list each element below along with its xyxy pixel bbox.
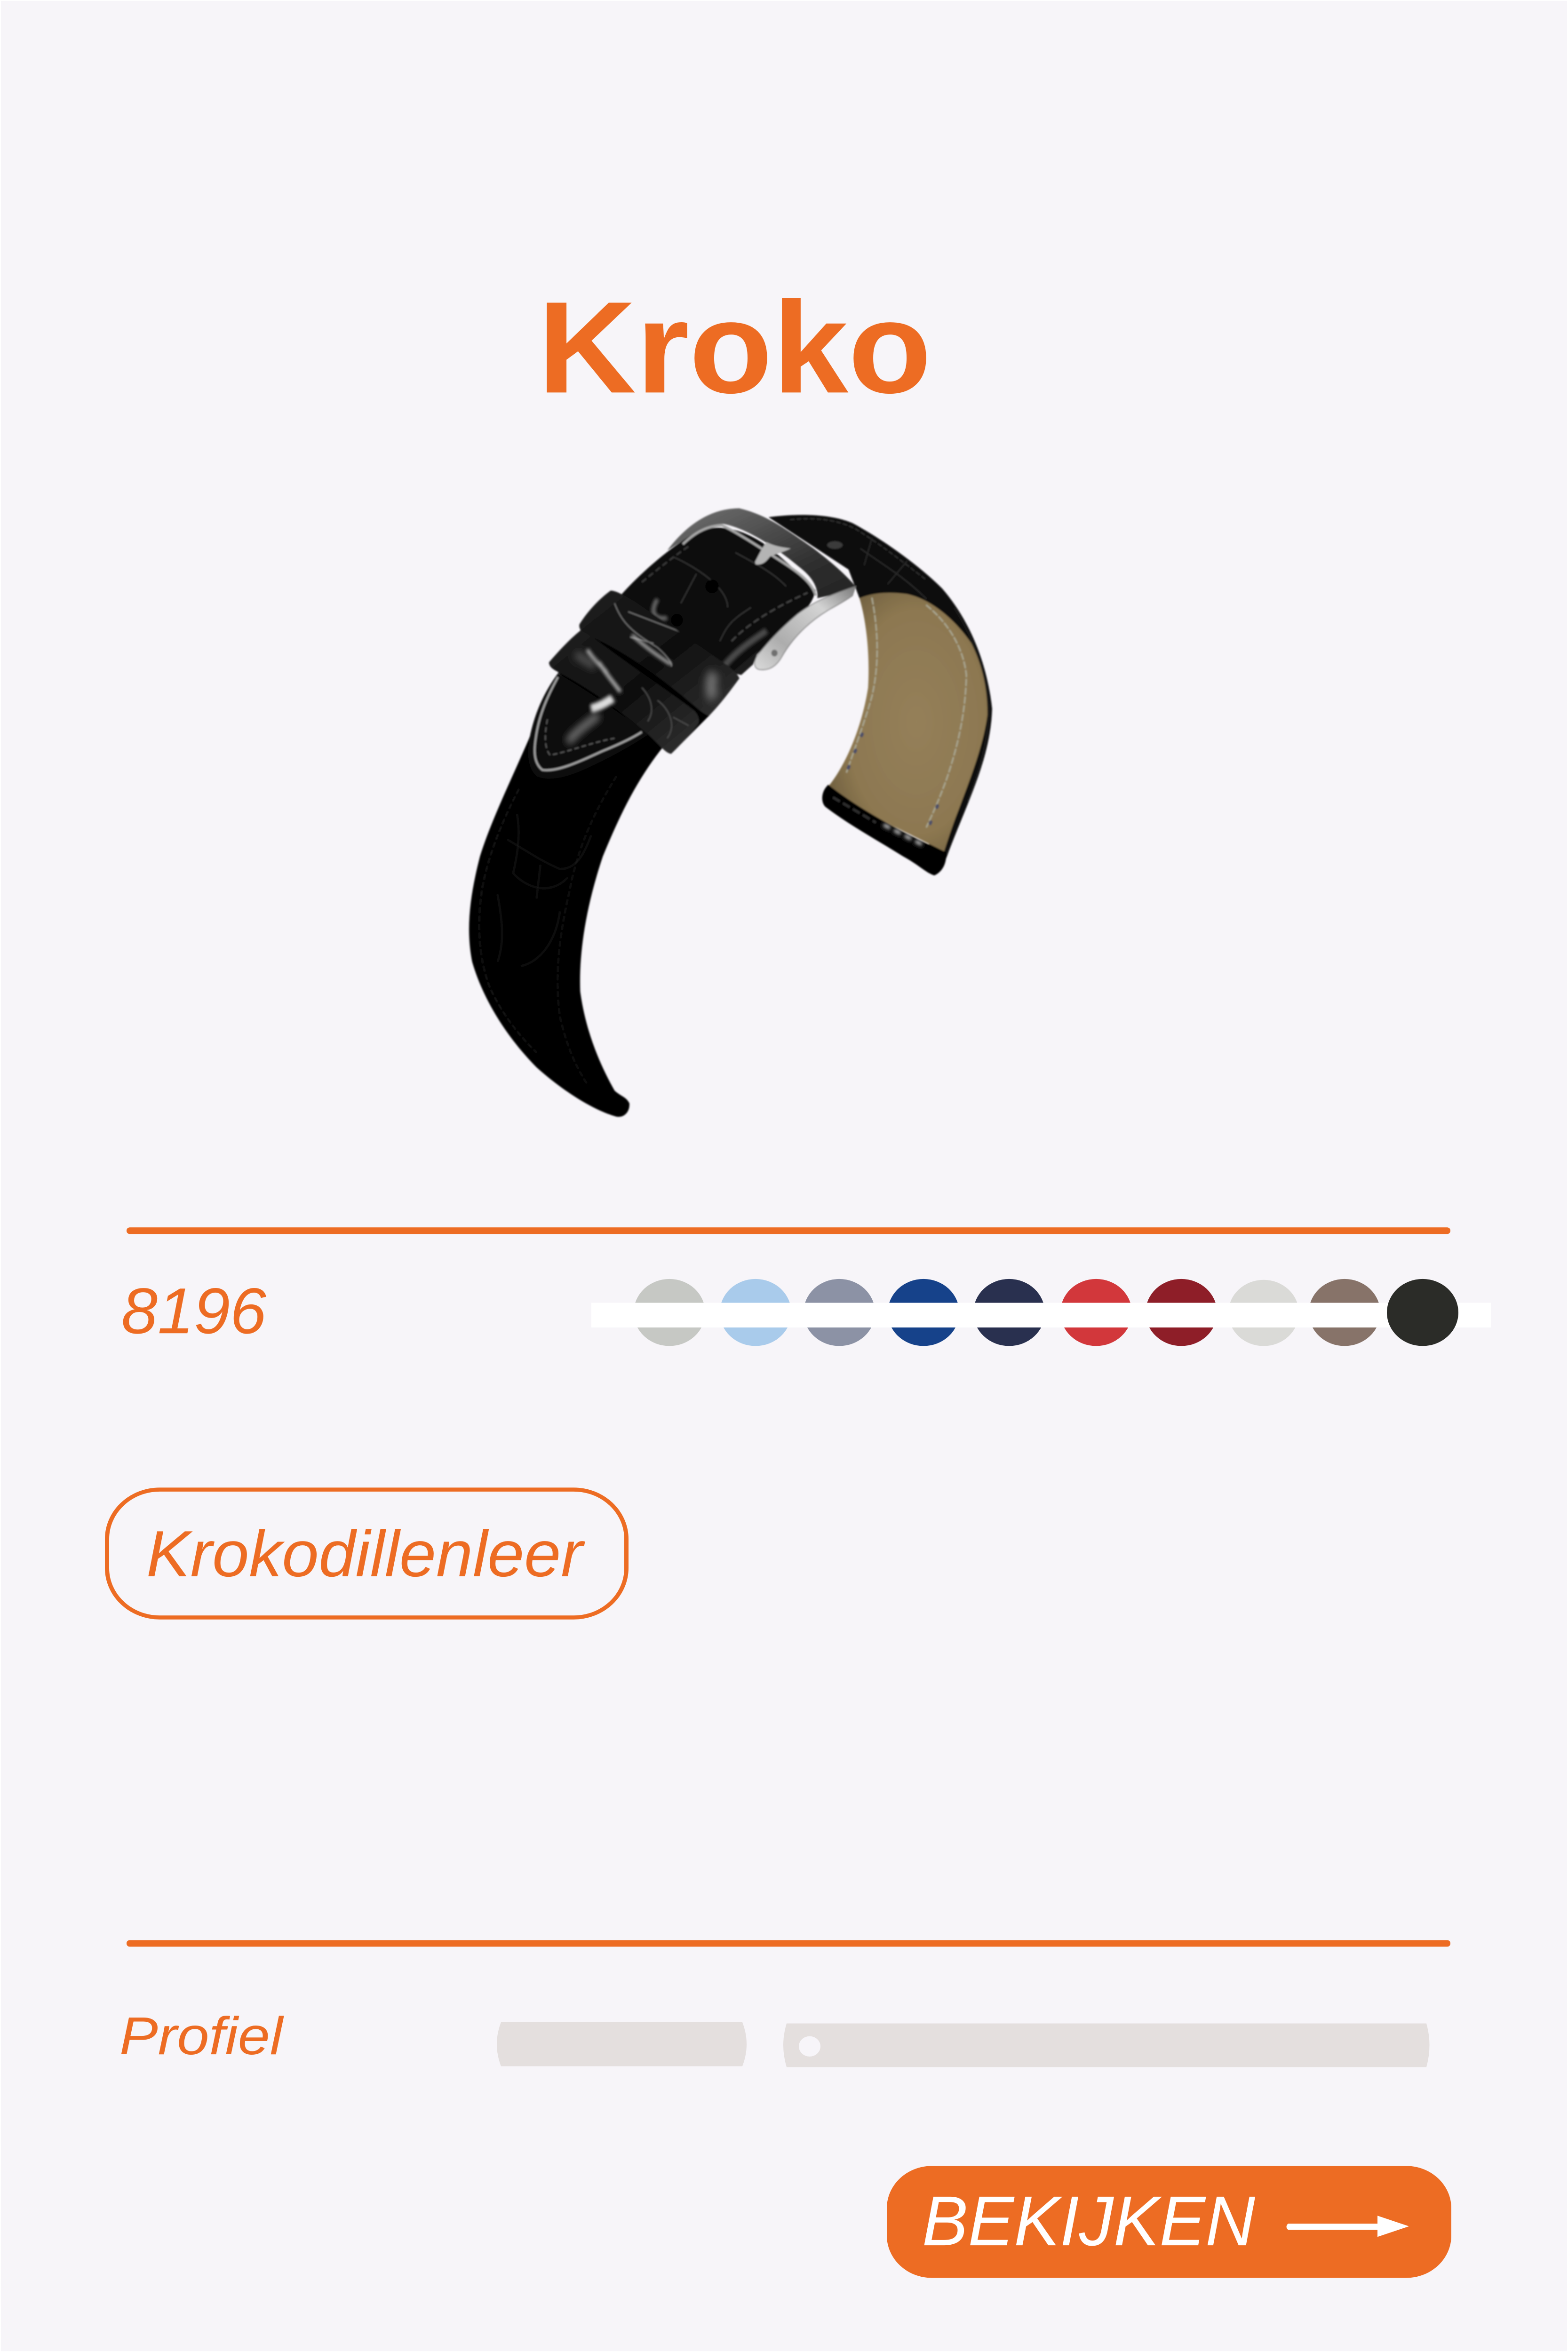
- product image: watch strap: [469, 509, 992, 1117]
- article number: 8196: [121, 1275, 267, 1347]
- colour swatches: [591, 1279, 1491, 1346]
- profile bar left: [497, 2022, 747, 2066]
- long strap: [469, 696, 663, 1117]
- lining stitching: [846, 598, 966, 828]
- profile label: Profiel: [119, 2006, 284, 2066]
- far strap outer leather: [769, 515, 992, 861]
- material tag: [107, 1490, 627, 1617]
- profile bar right with marker: [783, 2024, 1429, 2067]
- arrow: [1286, 2216, 1409, 2237]
- far strap texture and stitching: [790, 519, 989, 802]
- button: [887, 2166, 1451, 2278]
- button: BEKIJKEN: [922, 2182, 1256, 2260]
- long strap texture: [479, 776, 616, 1084]
- buckle inner edge: [683, 525, 816, 596]
- keeper lower: [549, 631, 699, 754]
- buckle tongue: [755, 542, 791, 564]
- material tag: Krokodillenleer: [146, 1518, 585, 1590]
- buckle lug: [755, 587, 856, 670]
- keeper upper: [579, 591, 740, 715]
- strap tip: [528, 673, 648, 779]
- buckle: [667, 509, 856, 675]
- far strap end: [822, 785, 946, 875]
- strap holes: [705, 580, 719, 593]
- keeper underlay: [558, 593, 740, 754]
- title: Kroko: [538, 274, 931, 420]
- top divider: [127, 1227, 1450, 1234]
- lining: [829, 593, 987, 851]
- strap under buckle: [621, 528, 816, 673]
- bottom divider: [127, 1940, 1450, 1947]
- buckle bar: [667, 509, 856, 598]
- strap under buckle texture: [642, 546, 808, 641]
